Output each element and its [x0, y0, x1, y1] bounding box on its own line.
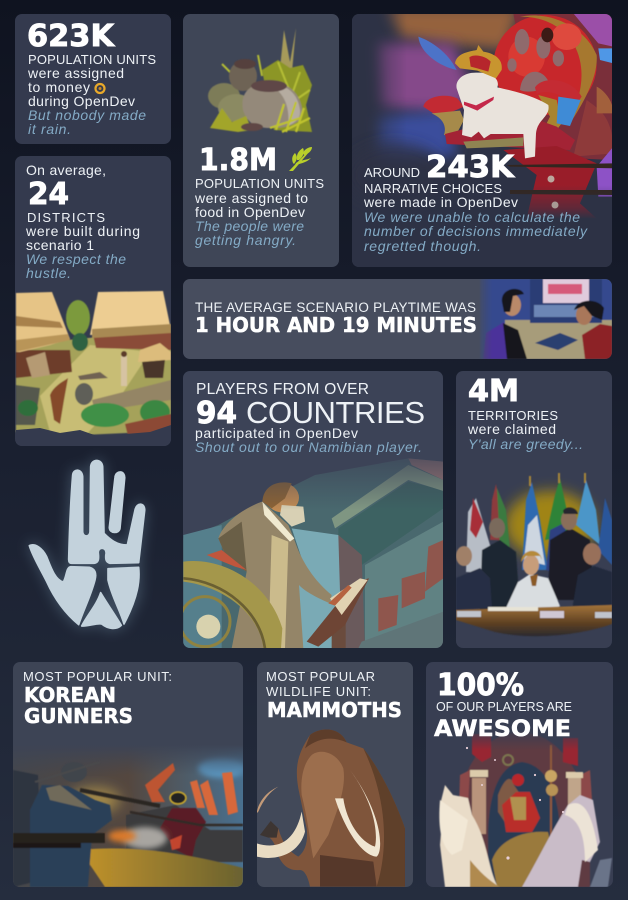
countries joke: Shout out to our Namibian player. [195, 439, 422, 455]
money description: POPULATION UNITS [28, 52, 156, 67]
panel: awesome [426, 662, 613, 887]
food description: POPULATION UNITS [195, 176, 324, 191]
illustration: cat on throne [345, 7, 613, 267]
panel: territories [456, 371, 612, 648]
panel: korean gunners [13, 662, 246, 887]
narrative stat line: 243K [426, 150, 516, 185]
food joke [195, 218, 304, 248]
districts description: scenario 1 [26, 237, 94, 253]
food joke: getting hangry. [195, 232, 296, 248]
narrative joke: We were unable to calculate the [364, 209, 580, 225]
korean card background [13, 662, 243, 887]
food description [194, 176, 324, 220]
narrative joke: number of decisions immediately [364, 223, 588, 239]
countries stat: COUNTRIES [246, 395, 425, 430]
logo: hand [29, 460, 145, 629]
countries intro: PLAYERS FROM OVER [196, 381, 369, 398]
districts intro: On average, [26, 162, 106, 178]
food stat: 1.8M [199, 143, 277, 178]
food description: food in OpenDev [195, 204, 305, 220]
countries card background [183, 371, 443, 648]
territories joke: Y'all are greedy... [468, 436, 583, 452]
narrative description: were made in OpenDev [363, 194, 518, 210]
districts description: were built during [25, 223, 140, 239]
illustration: flags and signing table [456, 473, 612, 636]
icon: coin [96, 84, 104, 93]
territories description: TERRITORIES [468, 408, 558, 423]
awesome description: OF OUR PLAYERS ARE [436, 700, 572, 714]
panel: districts [15, 156, 171, 446]
panel: money [15, 14, 171, 144]
illustration: pots and grain [208, 28, 312, 132]
money description: during OpenDev [28, 93, 135, 109]
districts card background [15, 156, 171, 446]
awesome card background [426, 662, 613, 887]
countries description: participated in OpenDev [195, 425, 358, 441]
districts joke: We respect the [26, 251, 126, 267]
playtime card background [183, 279, 612, 359]
illustration: village [16, 291, 171, 446]
awesome stat: 100% [437, 668, 524, 703]
mammoth label [266, 669, 375, 699]
korean name: KOREAN [24, 683, 116, 707]
mammoth label: MOST POPULAR [266, 669, 375, 684]
panel: food [183, 14, 339, 267]
mammoth name: MAMMOTHS [267, 698, 402, 722]
playtime value: 1 HOUR AND 19 MINUTES [195, 313, 477, 337]
districts stat: 24 [28, 177, 69, 212]
mammoth label: WILDLIFE UNIT: [266, 684, 371, 699]
korean name [24, 683, 133, 728]
money description: to money [28, 79, 90, 95]
panel: countries [180, 371, 443, 648]
mammoth card background [257, 662, 413, 887]
districts description: DISTRICTS [27, 210, 105, 225]
money card background [15, 14, 171, 144]
narrative description: NARRATIVE CHOICES [364, 181, 502, 196]
districts joke [26, 251, 126, 281]
territories card background [456, 371, 612, 648]
narrative description [363, 181, 518, 210]
narrative card background [352, 14, 612, 267]
illustration: mammoth [257, 729, 405, 887]
playtime label: THE AVERAGE SCENARIO PLAYTIME WAS [195, 300, 476, 315]
territories stat: 4M [468, 374, 519, 409]
illustration: battle [13, 745, 246, 887]
money joke [28, 107, 146, 137]
territories description [467, 408, 558, 437]
korean label: MOST POPULAR UNIT: [23, 669, 172, 684]
food card background [183, 14, 339, 267]
narrative stat line [364, 150, 516, 185]
narrative joke [364, 209, 588, 254]
illustration: kids playing a console [476, 279, 612, 359]
narrative joke: regretted though. [364, 238, 481, 254]
icon: wheat [289, 147, 312, 171]
money stat: 623K [27, 19, 116, 54]
panel: narrative choices [345, 7, 613, 267]
money joke: But nobody made [28, 107, 146, 123]
money description: were assigned [27, 65, 124, 81]
money joke: it rain. [28, 121, 71, 137]
panel: playtime [183, 279, 612, 359]
awesome word: AWESOME [434, 717, 571, 742]
food description: were assigned to [194, 190, 308, 206]
territories description: were claimed [467, 421, 556, 437]
narrative stat line: AROUND [364, 165, 420, 180]
panel: mammoths [257, 662, 413, 887]
districts joke: hustle. [26, 265, 71, 281]
food joke: The people were [195, 218, 304, 234]
districts description [25, 210, 140, 253]
illustration: triumph chariot [439, 728, 612, 887]
countries stat: 94 [196, 396, 237, 431]
money description [27, 52, 156, 109]
korean name: GUNNERS [24, 704, 133, 728]
illustration: scholar with armillary sphere [183, 458, 443, 648]
